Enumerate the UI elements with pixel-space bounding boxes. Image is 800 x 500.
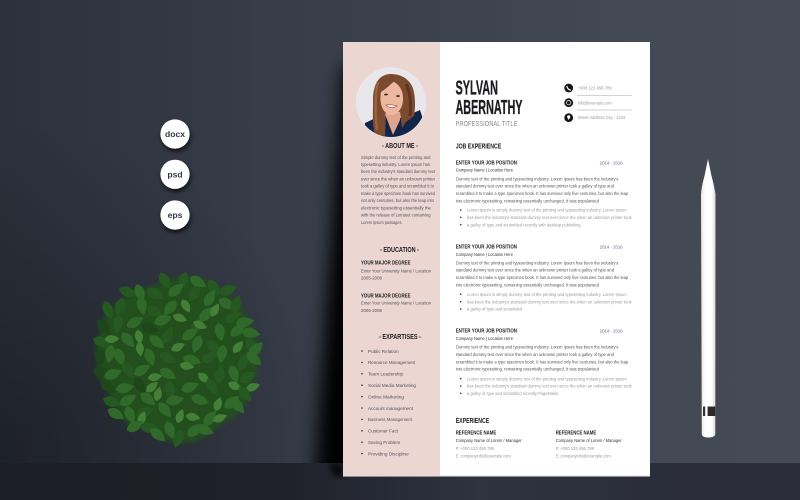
- about me text: with the release of Letraset containing: [361, 213, 431, 218]
- education entries: [361, 261, 431, 313]
- reference 2: P. +000 123 456 789: [556, 446, 594, 451]
- skills list: Saving Problem: [368, 440, 400, 445]
- heading: about me: - ABOUT ME -: [382, 141, 418, 150]
- job entry 1: into electronic typesetting, remaining essentially unchanged. It was popularised: [456, 198, 599, 203]
- job entry 2: Dummy text of the printing and typesetting industry. Lorem Ipsum has been the industry's: [456, 260, 619, 265]
- contact details: info@example.com: [578, 100, 612, 105]
- job entry 2: into electronic typesetting, remaining essentially unchanged. It was popularised: [456, 282, 599, 287]
- badge: docx: docx: [165, 129, 185, 139]
- about me text: Simple dummy text of the printing and: [361, 155, 431, 160]
- name title: SYLVAN: [456, 77, 498, 99]
- skills list: Resource Management: [368, 360, 416, 365]
- job entry 1: [456, 160, 632, 227]
- pencil band: [703, 406, 715, 416]
- contact details: +000 123 456 789: [578, 86, 612, 91]
- badge: eps: eps: [168, 210, 183, 220]
- job entry 2: a galley of type and scrambled: [467, 307, 522, 312]
- reference 1: [456, 430, 522, 459]
- about me text: typesetting industry. Lorem Ipsum has: [361, 162, 431, 167]
- icon: location: [564, 113, 573, 122]
- skills list: Public Relation: [368, 349, 399, 354]
- job entry 2: Lorem Ipsum is simply dummy text of the printing and typesetting industry. Lorem Ipsum: [467, 292, 627, 297]
- about me text: been the industry's standard dummy text: [361, 169, 436, 174]
- skills list: [361, 349, 416, 456]
- job entry 3: Company Name | Location Here: [456, 336, 513, 341]
- job entry 3: 2014 - 2016: [600, 329, 623, 334]
- about me text: [361, 155, 436, 225]
- icon: stylus pencil: [701, 159, 716, 438]
- job entry 3: [456, 329, 632, 396]
- job entry 1: Company Name | Location Here: [456, 168, 513, 173]
- skills list: Account management: [368, 406, 414, 411]
- job entry 1: standard dummy text ever since the when an unknown printer took a galley of type and: [456, 184, 614, 189]
- about me text: Lorem Ipsum passages.: [361, 220, 402, 225]
- about me text: ever since the when an unknown printer: [361, 176, 435, 182]
- job entry 3: into electronic typesetting, remaining essentially unchanged. It was popularised: [456, 367, 599, 372]
- job entry 2: has been the industry's standard dummy text ever since the when an unknown printer took: [467, 299, 632, 304]
- reference 2: E. companyinfo@example.com: [556, 454, 611, 459]
- panel: pink sidebar: [343, 42, 440, 476]
- heading: job experience: JOB EXPERIENCE: [456, 141, 501, 150]
- job entry 3: scrambled it to make a type specimen book. It has survived only five centuries, but also the leap: [456, 359, 629, 364]
- icon: phone: [564, 84, 573, 92]
- education entries: YOUR MAJOR DEGREE: [361, 293, 411, 299]
- skills list: Providing Discipline: [368, 451, 409, 456]
- skills list: Customer Fact: [368, 429, 399, 434]
- heading: expartises: - EXPARTISES -: [379, 332, 421, 341]
- name title: [456, 77, 523, 119]
- heading: education: - EDUCATION -: [380, 245, 419, 254]
- icon: plant from above: [91, 270, 266, 450]
- format badges: [160, 119, 190, 230]
- contact details: Street Address City - 1234: [578, 115, 626, 120]
- job entry 3: has been the industry's standard dummy text ever since the when an unknown printer took: [467, 384, 632, 389]
- about me text: electronic typesetting essentially the: [361, 205, 431, 210]
- reference 2: Company Name of Lorem / Manager: [556, 438, 622, 443]
- reference 1: Company Name of Lorem / Manager: [456, 438, 522, 443]
- job entry 3: ENTER YOUR JOB POSITION: [456, 329, 517, 335]
- about me text: make a type specimen book has survived: [361, 191, 435, 196]
- job entry 1: Dummy text of the printing and typesetting industry. Lorem Ipsum has been the industry's: [456, 176, 619, 181]
- education entries: 2005-2008: [361, 276, 382, 281]
- document floor shadow: [328, 463, 343, 477]
- reference 1: REFERENCE NAME: [456, 430, 497, 436]
- job entry 2: scrambled it to make a type specimen book. It has survived only five centuries, but also the leap: [456, 275, 629, 280]
- education entries: Enter Your University Name / Location: [361, 268, 431, 273]
- reference 2: REFERENCE NAME: [556, 430, 597, 436]
- job entry 2: ENTER YOUR JOB POSITION: [456, 244, 517, 250]
- job entry 3: Dummy text of the printing and typesetting industry. Lorem Ipsum has been the industry's: [456, 345, 619, 350]
- portrait photo: [356, 67, 426, 140]
- skills list: Team Leadership: [368, 372, 403, 377]
- education entries: Enter Your University Name / Location: [361, 301, 431, 306]
- badge: psd: psd: [167, 169, 183, 179]
- about me text: not only centuries, but also the leap into: [361, 198, 434, 203]
- heading: experience: EXPERIENCE: [456, 416, 489, 425]
- job entry 3: a galley of type and scrambled recently PageMaker: [467, 391, 559, 396]
- reference 2: [556, 430, 622, 459]
- job entry 2: standard dummy text ever since the when an unknown printer took a galley of type and: [456, 268, 614, 273]
- job entry 2: 2014 - 2016: [600, 244, 623, 249]
- education entries: YOUR MAJOR DEGREE: [361, 261, 411, 267]
- job entry 1: 2014 - 2016: [600, 160, 623, 165]
- job entry 1: scrambled it to make a type specimen book. It has survived only five centuries, but also the leap: [456, 191, 629, 196]
- job entry 2: [456, 244, 632, 312]
- job entry 1: has been the industry's standard dummy text ever since the when an unknown printer took: [467, 215, 632, 220]
- job entry 1: Lorem Ipsum is simply dummy text of the printing and typesetting industry. Lorem Ipsum: [467, 208, 627, 213]
- contact details: [564, 84, 632, 122]
- icon: email: [564, 98, 573, 107]
- job entry 3: standard dummy text ever since the when an unknown printer took a galley of type and: [456, 352, 614, 357]
- job entry 1: a galley of type and scrambled recently with desktop publishing.: [467, 222, 582, 227]
- document shadow: [306, 58, 343, 463]
- professional title: PROFESSIONAL TITLE: [456, 119, 518, 128]
- resume page: [343, 42, 650, 477]
- about me text: took a galley of type and scrambled it to: [361, 184, 434, 189]
- name title: ABERNATHY: [456, 97, 523, 119]
- job entry 1: ENTER YOUR JOB POSITION: [456, 160, 517, 166]
- education entries: 2005-2008: [361, 308, 382, 313]
- floor: [0, 463, 800, 500]
- reference 1: E. companyinfo@example.com: [456, 454, 511, 459]
- skills list: Online Marketing: [368, 394, 404, 399]
- skills list: Business Management: [368, 417, 413, 422]
- reference 1: P. +000 123 456 789: [456, 446, 494, 451]
- skills list: Social Media Marketing: [368, 383, 416, 388]
- job entry 2: Company Name | Location Here: [456, 252, 513, 257]
- job entry 3: Lorem Ipsum is simply dummy text of the printing and typesetting industry. Lorem Ipsum: [467, 376, 627, 381]
